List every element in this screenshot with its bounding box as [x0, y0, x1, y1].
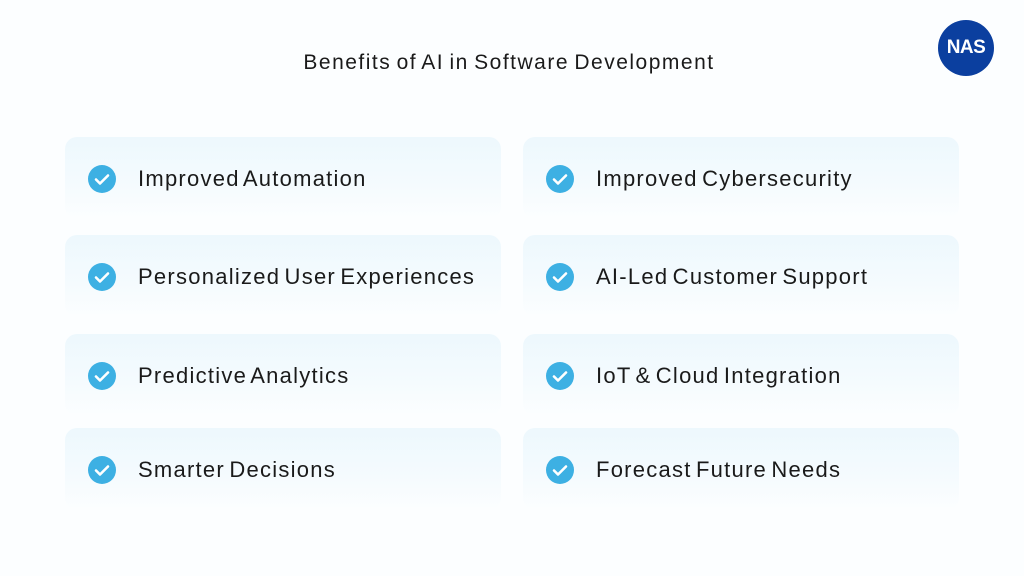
card: Improved Automation: Improved Automation: [138, 166, 367, 191]
card: Improved Cybersecurity: [523, 137, 959, 219]
title: Benefits of AI in Software Development: [303, 51, 715, 74]
card: Forecast Future Needs: Forecast Future Needs: [596, 457, 841, 482]
card: Personalized User Experiences: [65, 235, 501, 317]
logo: [938, 20, 994, 76]
logo: NAS: [947, 37, 985, 58]
card: Predictive Analytics: Predictive Analytics: [138, 363, 350, 388]
card: Forecast Future Needs: [523, 428, 959, 510]
card: IoT & Cloud Integration: IoT & Cloud Integration: [596, 363, 842, 388]
card: Personalized User Experiences: Personalized User Experiences: [138, 264, 475, 289]
card: Smarter Decisions: [65, 428, 501, 510]
card: Improved Automation: [65, 137, 501, 219]
card: Improved Cybersecurity: Improved Cybersecurity: [596, 166, 853, 191]
card: AI-Led Customer Support: [523, 235, 959, 317]
card: IoT & Cloud Integration: [523, 334, 959, 416]
card: Smarter Decisions: Smarter Decisions: [138, 457, 336, 482]
card: AI-Led Customer Support: AI-Led Customer Support: [596, 264, 868, 289]
card: Predictive Analytics: [65, 334, 501, 416]
